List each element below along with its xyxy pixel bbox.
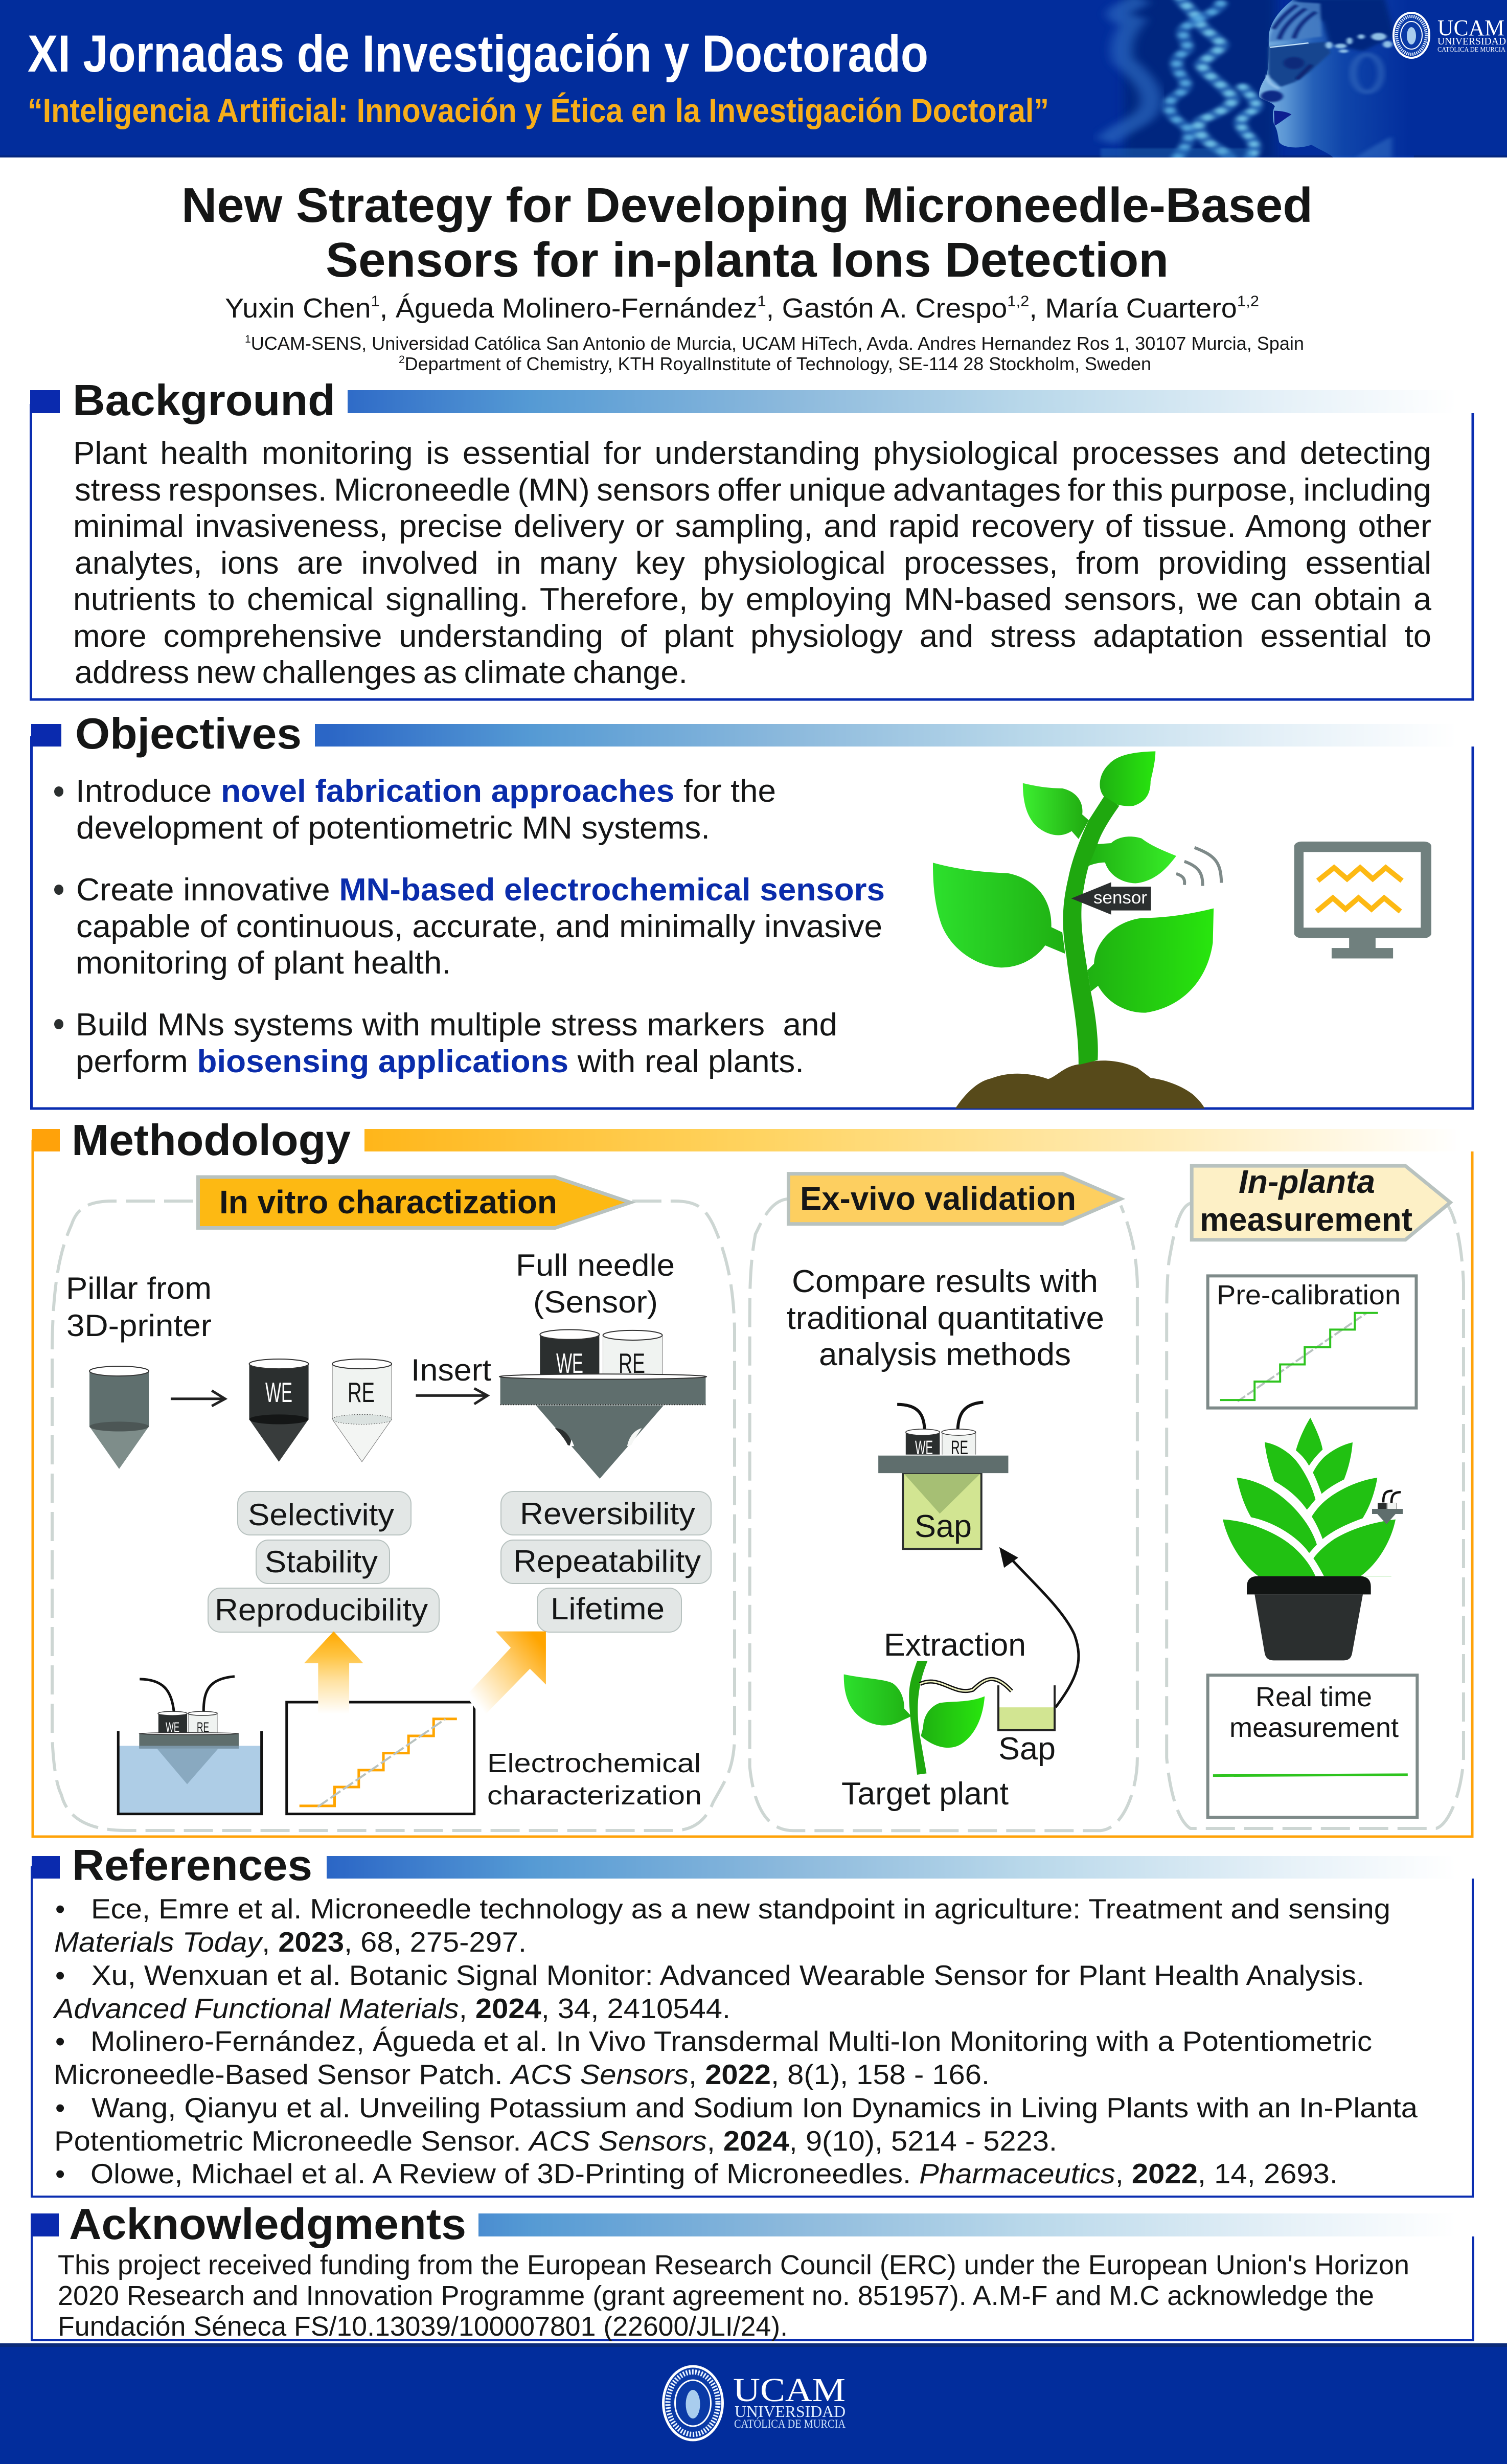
background paragraph: analytes, ions are involved in many key physiological processes, from providing essential [75, 546, 1431, 581]
panel: methodology [0, 1116, 1507, 2464]
reference list: Microneedle-Based Sensor Patch. ACS Sensors , 2022, 8(1), 158 - 166. [54, 2059, 990, 2090]
background paragraph: Plant health monitoring is essential for understanding physiological processes and detecting [73, 436, 1431, 471]
heading: references: References [72, 1841, 312, 1890]
header logo: UNIVERSIDAD [1437, 36, 1506, 47]
acknowledgments paragraph [58, 2250, 1409, 2342]
pill: reproducibility: Reproducibility [215, 1593, 428, 1627]
reference list: Ece, Emre et al. Microneedle technology as a new standpoint in agriculture: Treatment and sensing [91, 1893, 1390, 1925]
banner: ex-vivo [788, 1174, 1121, 1224]
arrow: up to left pills [304, 1632, 363, 1714]
reference list: Potentiometric Microneedle Sensor. ACS Sensors , 2024, 9(10), 5214 - 5223. [54, 2125, 1057, 2157]
authors: 1 [757, 293, 766, 310]
pill: selectivity: Selectivity [248, 1498, 394, 1532]
sensor label: sensor [1093, 888, 1147, 908]
title: New Strategy for Developing Microneedle-Based [181, 178, 1313, 233]
banner: in vitro [198, 1177, 630, 1228]
pill: selectivity [238, 1491, 411, 1535]
label: pillar [66, 1271, 212, 1343]
reference list: • [55, 1893, 65, 1925]
pill: reversibility [501, 1491, 711, 1535]
header title: XI Jornadas de Investigación y Doctorado [28, 25, 928, 83]
label: extraction: Extraction [884, 1627, 1026, 1663]
pillar labels: RE [619, 1347, 645, 1379]
reference list: • [55, 2025, 65, 2057]
label: full needle [516, 1248, 675, 1319]
background paragraph: nutrients to chemical signalling. Therefore, by employing MN-based sensors, we can obtain a [73, 582, 1432, 617]
label: sap in sensor beaker: Sap [915, 1509, 972, 1544]
background paragraph [73, 436, 1432, 690]
text: compare results [787, 1264, 1104, 1372]
pill: stability [256, 1540, 390, 1584]
banner: in-planta: In-planta [1239, 1163, 1375, 1200]
chart: electrochemical staircase [287, 1702, 474, 1814]
heading: methodology: Methodology [72, 1116, 351, 1165]
reference list: • [55, 2158, 65, 2189]
affiliations [245, 333, 1304, 374]
diagram: beaker with sensor [118, 1677, 262, 1814]
header subtitle: “Inteligencia Artificial: Innovación y Ética en la Investigación Doctoral” [28, 92, 1049, 129]
arrow: diagonal to right pills [466, 1632, 546, 1718]
pillar labels [265, 1347, 645, 1408]
pillar labels: WE [265, 1376, 292, 1408]
text: compare results: traditional quantitative [787, 1301, 1104, 1336]
objective 2: Create innovative MN-based electrochemical sensors [76, 872, 885, 908]
label: full needle: (Sensor) [533, 1285, 658, 1319]
objective 3: Build MNs systems with multiple stress markers and [76, 1007, 837, 1043]
reference list: Materials Today , 2023, 68, 275-297. [54, 1926, 527, 1958]
pill: reversibility: Reversibility [520, 1497, 695, 1531]
authors: , Gastón A. Crespo [766, 293, 1007, 324]
pillar labels: RE [348, 1376, 375, 1408]
diagram: sensor in sap: RE [951, 1437, 968, 1459]
sub-panel: in-planta measurement [1167, 1163, 1464, 1828]
chart: real time measurement [1208, 1675, 1417, 1817]
chart: pre-calibration: Pre-calibration [1217, 1280, 1401, 1310]
background paragraph: more comprehensive understanding of plant physiology and stress adaptation essential to [73, 619, 1431, 654]
background paragraph: stress responses. Microneedle (MN) sensors offer unique advantages for this purpose, including [75, 472, 1431, 508]
pill: lifetime: Lifetime [551, 1592, 665, 1626]
objective 2 [54, 872, 885, 981]
diagram: beaker with sensor: RE [197, 1720, 209, 1735]
pill: repeatability: Repeatability [513, 1544, 701, 1578]
footer logo [664, 2366, 846, 2440]
reference list: Xu, Wenxuan et al. Botanic Signal Monitor: Advanced Wearable Sensor for Plant Health Analysis. [92, 1959, 1364, 1991]
affiliations: UCAM-SENS, Universidad Católica San Antonio de Murcia, UCAM HiTech, Avda. Andres Hernandez Ros 1, 30107 Murcia, Spain [251, 333, 1304, 354]
objective 3 [54, 1007, 837, 1079]
footer logo: CATÓLICA DE MURCIA [734, 2417, 846, 2430]
diagram: beaker with sensor: WE [166, 1720, 179, 1735]
acknowledgments paragraph: Fundación Séneca FS/10.13039/100007801 (22600/JLI/24). [58, 2311, 788, 2342]
pill: repeatability [501, 1540, 711, 1584]
objective 3: perform biosensing applications with real plants. [76, 1044, 804, 1079]
panel: references [32, 1841, 1473, 2197]
header image: DNA and scientist face [1101, 0, 1414, 164]
banner: in-planta [1192, 1163, 1450, 1240]
label: sap: Sap [998, 1731, 1056, 1767]
affiliations: 1 [245, 333, 251, 345]
header logo [1394, 13, 1506, 58]
authors: Yuxin Chen [225, 293, 366, 324]
pill: lifetime [537, 1588, 681, 1632]
reference list: Olowe, Michael et al. A Review of 3D-Printing of Microneedles. Pharmaceutics , 2022, 14, 2693. [90, 2158, 1338, 2189]
background paragraph: minimal invasiveness, precise delivery or sampling, and rapid recovery of tissue. Among other [73, 509, 1431, 544]
label: pillar: 3D-printer [66, 1308, 212, 1343]
heading: objectives: Objectives [75, 710, 302, 758]
banner: ex-vivo: Ex-vivo validation [800, 1180, 1076, 1217]
label: electrochemical characterization: characterization [487, 1781, 702, 1811]
sub-panel: ex-vivo validation [750, 1174, 1137, 1830]
authors: , Águeda Molinero-Fernández [380, 293, 757, 324]
reference list [53, 1893, 1418, 2189]
icon: plant with sensor [933, 751, 1221, 1109]
heading: background: Background [73, 376, 335, 425]
objective 1: Introduce novel fabrication approaches for the [76, 774, 776, 809]
diagram: sensor in sap [878, 1402, 1008, 1549]
header logo: UCAM [1437, 15, 1504, 40]
affiliations: 2 [399, 354, 405, 366]
label: electrochemical characterization [487, 1749, 702, 1811]
acknowledgments paragraph: This project received funding from the European Research Council (ERC) under the European Union's Horizon [58, 2250, 1409, 2280]
reference list: Molinero-Fernández, Águeda et al. In Vivo Transdermal Multi-Ion Monitoring with a Potentiometric [90, 2025, 1372, 2057]
chart: pre-calibration [1208, 1276, 1416, 1408]
background paragraph: address new challenges as climate change. [75, 655, 688, 690]
reference list: Advanced Functional Materials , 2024, 34, 2410544. [53, 1993, 730, 2024]
heading: acknowledgments: Acknowledgments [69, 2200, 466, 2249]
objective 2: monitoring of plant health. [76, 945, 451, 981]
objective 2: capable of continuous, accurate, and minimally invasive [76, 909, 882, 944]
pillar labels: WE [556, 1347, 583, 1379]
title [181, 178, 1313, 287]
header banner [0, 0, 1507, 164]
authors: 1 [371, 293, 380, 310]
objective 1: development of potentiometric MN systems. [76, 810, 710, 846]
affiliations: Department of Chemistry, KTH RoyalInstitute of Technology, SE-114 28 Stockholm, Sweden [405, 353, 1151, 374]
text: compare results: analysis methods [819, 1337, 1071, 1372]
pill: reproducibility [208, 1588, 439, 1632]
acknowledgments paragraph: 2020 Research and Innovation Programme (grant agreement no. 851957). A.M-F and M.C acknowledge the [58, 2280, 1374, 2311]
footer logo: UNIVERSIDAD [735, 2402, 846, 2421]
panel: acknowledgments [31, 2200, 1473, 2342]
label: insert: Insert [411, 1353, 491, 1387]
label: electrochemical characterization: Electrochemical [487, 1749, 701, 1778]
reference list: Wang, Qianyu et al. Unveiling Potassium and Sodium Ion Dynamics in Living Plants with an In-Planta [92, 2092, 1418, 2123]
panel: objectives [31, 710, 1473, 1109]
diagram: sensor in sap: WE [915, 1437, 933, 1459]
icon: potted plant with sensor [1223, 1418, 1403, 1660]
icon: target plant and tube [844, 1661, 1055, 1775]
icon: monitor [1294, 842, 1431, 958]
label: full needle: Full needle [516, 1248, 675, 1282]
text: compare results: Compare results with [792, 1264, 1098, 1299]
footer logo: UCAM [733, 2371, 846, 2409]
reference list: • [55, 2092, 65, 2123]
chart: real time measurement: Real time [1255, 1682, 1372, 1712]
chart: real time measurement: measurement [1229, 1712, 1399, 1743]
authors: , María Cuartero [1029, 293, 1237, 324]
banner: in vitro: In vitro charactization [219, 1184, 557, 1220]
diagram: pillars and full needle [89, 1330, 706, 1479]
authors: 1,2 [1237, 293, 1259, 310]
title: Sensors for in-planta Ions Detection [326, 233, 1169, 287]
reference list: • [55, 1959, 65, 1991]
banner: in-planta: measurement [1200, 1201, 1412, 1238]
label: pillar: Pillar from [66, 1271, 212, 1305]
footer [0, 2343, 1507, 2464]
label: target plant: Target plant [841, 1776, 1009, 1812]
arrow: sap to sensor [999, 1547, 1079, 1707]
objective 1 [54, 774, 776, 846]
sub-panel: in vitro characterization [52, 1177, 735, 1830]
authors: 1,2 [1007, 293, 1029, 310]
panel: background [30, 376, 1473, 699]
pill: stability: Stability [265, 1545, 378, 1579]
